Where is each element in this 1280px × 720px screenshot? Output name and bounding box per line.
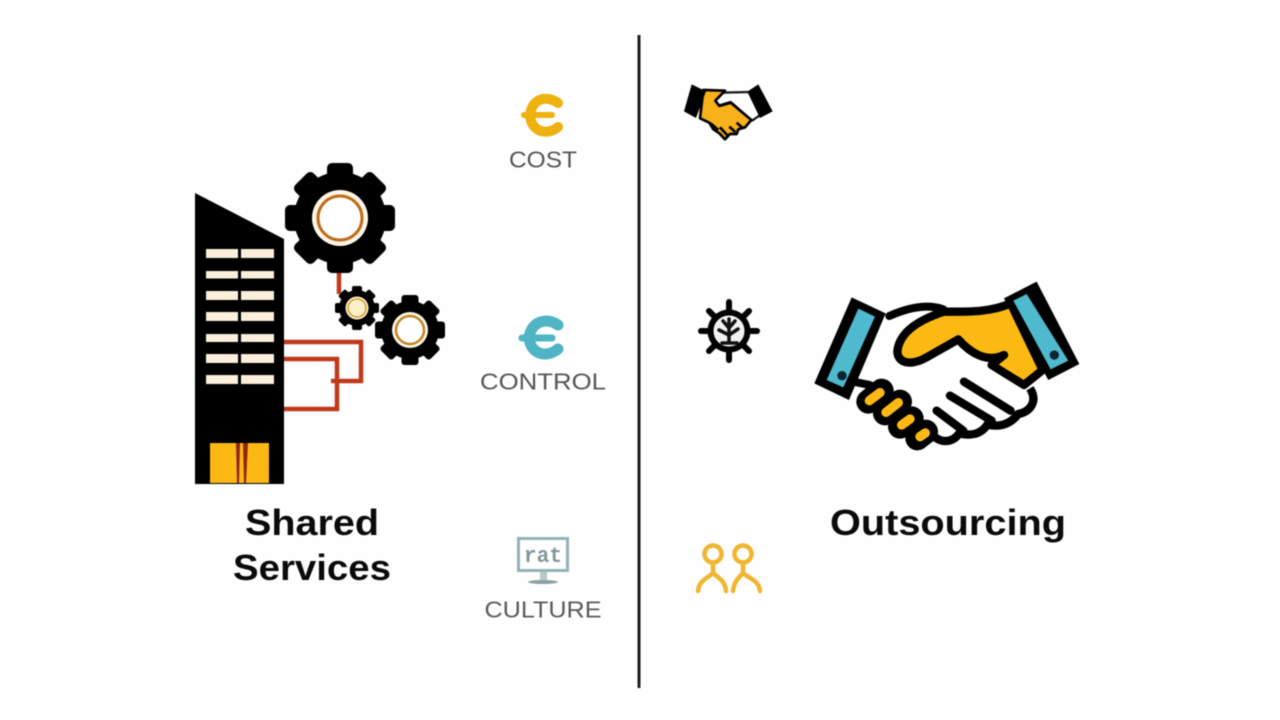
icon: teal euro	[522, 321, 558, 354]
heading: Outsourcing: Outsourcing	[830, 502, 1066, 543]
criterion: control	[480, 321, 606, 394]
heading: Shared Services: Shared	[245, 502, 379, 543]
icon: yellow euro	[524, 99, 558, 132]
white hand	[867, 337, 1034, 441]
heading: Shared Services: Services	[233, 547, 391, 588]
label: cost: COST	[509, 146, 577, 172]
criterion: cost	[509, 99, 577, 172]
icon: monitor: rat	[524, 544, 562, 569]
label: culture: CULTURE	[484, 596, 602, 622]
icon: small handshake	[684, 84, 773, 139]
upper arm line	[889, 307, 943, 316]
left cuff	[814, 297, 886, 400]
fist of left hand	[853, 382, 926, 438]
finger lines	[937, 382, 1011, 431]
icon: large handshake	[814, 282, 1079, 441]
heading: Shared Services	[233, 502, 391, 588]
icon: building with gears	[195, 163, 445, 484]
large gear	[285, 163, 395, 273]
right cuff	[1004, 282, 1079, 380]
label: control: CONTROL	[480, 368, 606, 394]
red connector lines	[284, 272, 361, 409]
building tower	[195, 193, 284, 484]
tree emblem	[719, 319, 738, 343]
medium gear	[375, 295, 445, 365]
icon: two people	[698, 546, 760, 591]
small gear	[335, 286, 379, 330]
yellow hand	[897, 303, 1043, 385]
center divider line	[638, 35, 640, 688]
criterion: culture	[484, 538, 602, 622]
icon: ship wheel with tree	[701, 302, 757, 360]
